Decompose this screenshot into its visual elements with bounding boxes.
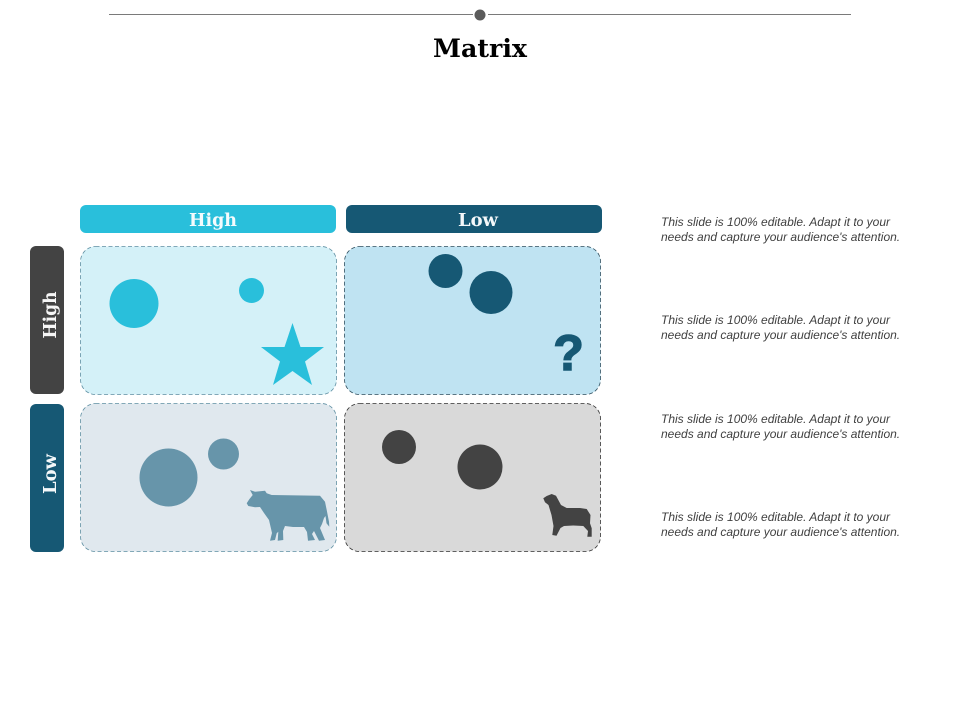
- bubble small: [382, 430, 416, 464]
- icon: dog: [543, 494, 592, 537]
- text block 3: This slide is 100% editable. Adapt it to your: [661, 412, 891, 426]
- icon: question mark: ?: [553, 325, 584, 381]
- row header: High: High: [41, 291, 61, 338]
- column header: High: [80, 205, 336, 233]
- text block 3: needs and capture your audience's attention.: [661, 427, 900, 441]
- header rule with dot: [109, 10, 851, 20]
- icon: star: [261, 323, 324, 385]
- row header: Low: [30, 404, 64, 552]
- panel: low/high question marks: [344, 246, 600, 394]
- column header: Low: [346, 205, 602, 233]
- text block 1: This slide is 100% editable. Adapt it to your: [661, 215, 891, 229]
- bubble large: [458, 444, 502, 490]
- bubble large: [110, 279, 158, 328]
- panel: high/high stars: [80, 246, 336, 394]
- column header: High: High: [189, 211, 237, 231]
- panel: low/low dogs: [344, 404, 600, 552]
- bubble large: [140, 448, 198, 506]
- text block 4: This slide is 100% editable. Adapt it to your: [661, 510, 891, 524]
- bubble small: [208, 438, 239, 470]
- bubble small: [239, 278, 264, 303]
- text block 2: needs and capture your audience's attention.: [661, 328, 900, 342]
- icon: cow: [247, 490, 329, 541]
- row header: Low: Low: [41, 453, 61, 494]
- text block 2: This slide is 100% editable. Adapt it to your: [661, 313, 891, 327]
- text block 1: needs and capture your audience's attention.: [661, 230, 900, 244]
- title: Matrix: [433, 34, 528, 63]
- row header: High: [30, 246, 64, 394]
- text block 4: needs and capture your audience's attention.: [661, 525, 900, 539]
- bubble large: [470, 271, 512, 314]
- bubble small: [428, 254, 462, 288]
- column header: Low: Low: [458, 211, 499, 231]
- panel: high/low cash cows: [80, 404, 336, 552]
